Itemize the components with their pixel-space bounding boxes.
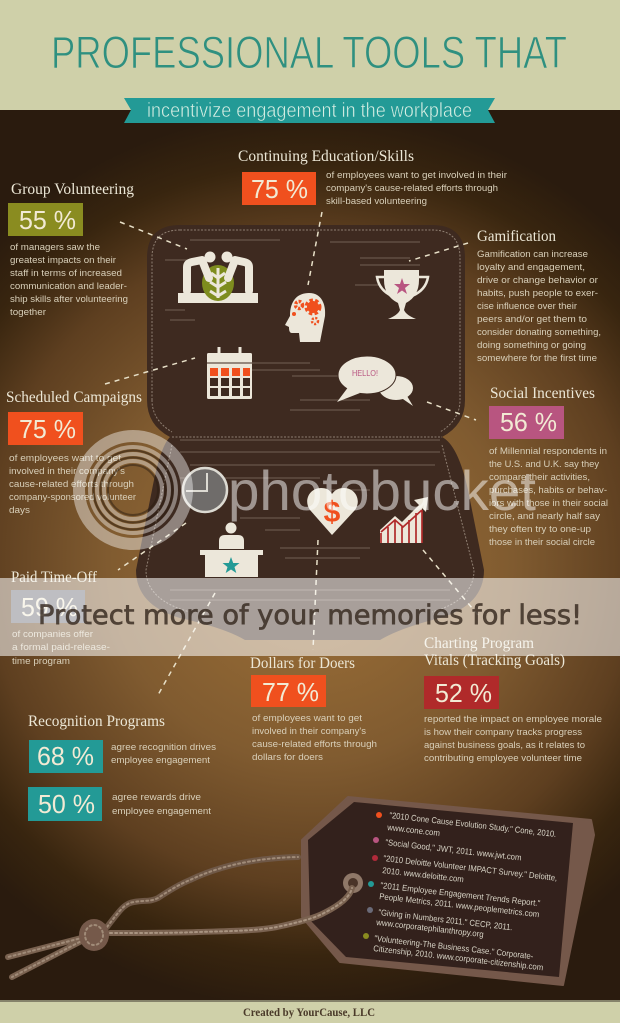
watermark logo xyxy=(79,436,187,544)
panel: dollars for doers: Dollars for Doers xyxy=(250,655,355,672)
panel: group volunteering xyxy=(8,181,134,318)
panel: paid time-off: of companies offer xyxy=(12,629,93,640)
panel: paid time-off: time program xyxy=(12,656,70,667)
panel: gamification xyxy=(477,228,601,364)
panel: social incentives: they often try to one-up xyxy=(489,524,591,535)
panel: continuing education: company's cause-related efforts through xyxy=(326,183,498,194)
sources tag xyxy=(302,797,594,985)
panel: continuing education: Continuing Education/Skills xyxy=(238,148,414,165)
panel: group volunteering: greatest impacts on their xyxy=(10,255,116,266)
panel: social incentives: of Millennial respondents in xyxy=(489,446,607,457)
panel: scheduled campaigns xyxy=(6,389,142,516)
panel: recognition programs: employee engagement xyxy=(111,755,210,766)
icon: calendar xyxy=(207,347,252,399)
panel: recognition programs: 68 % xyxy=(37,743,94,771)
panel: recognition programs: employee engagement xyxy=(112,806,211,817)
panel: scheduled campaigns: of employees want to get xyxy=(9,453,121,464)
header background xyxy=(0,0,620,110)
rope upper strand xyxy=(107,857,298,927)
panel: social incentives: circle, and nearly half say xyxy=(489,511,600,522)
panel: group volunteering: 55 % xyxy=(19,207,76,235)
panel: scheduled campaigns: company-sponsored volunteer xyxy=(9,492,136,503)
panel: dollars for doers: cause-related efforts through xyxy=(252,739,377,750)
panel: continuing education: skill-based volunteering xyxy=(326,196,427,207)
icon: clock xyxy=(183,468,227,512)
panel: recognition programs: agree rewards drive xyxy=(112,792,201,803)
sources tag: 2010. www.deloitte.com xyxy=(382,865,464,884)
panel: gamification: loyalty and engagement, xyxy=(477,262,585,273)
sources tag: "Social Good," JWT, 2011. www.jwt.com xyxy=(385,837,522,862)
panel: charting program vitals: Charting Program xyxy=(424,635,534,652)
panel: group volunteering: together xyxy=(10,307,46,318)
icon: person at podium with star xyxy=(200,522,263,577)
panel: continuing education: 75 % xyxy=(251,176,308,204)
panel: recognition programs: agree recognition drives xyxy=(111,742,216,753)
rope lower strand and knot xyxy=(8,888,352,977)
sources tag: "Volunteering-The Business Case." Corporate- xyxy=(374,933,534,961)
panel: gamification: consider donating something, xyxy=(477,327,601,338)
icon: speech bubbles: HELLO! xyxy=(352,369,378,378)
panel: scheduled campaigns: involved in their company's xyxy=(9,466,125,477)
panel: social incentives: Social Incentives xyxy=(490,385,595,402)
panel: charting program vitals: is how their company tracks progress xyxy=(424,727,582,738)
panel: paid time-off: 59 % xyxy=(21,594,78,622)
panel: paid time-off xyxy=(11,569,110,667)
panel: scheduled campaigns: Scheduled Campaigns xyxy=(6,389,142,406)
panel: paid time-off: a formal paid-release- xyxy=(12,642,110,653)
briefcase xyxy=(136,225,484,640)
panel: group volunteering: of managers saw the xyxy=(10,242,100,253)
panel: social incentives: 56 % xyxy=(500,409,557,437)
panel: group volunteering: Group Volunteering xyxy=(11,181,134,198)
watermark band: Protect more of your memories for less! xyxy=(38,600,582,631)
panel: social incentives: purchases, habits or behav- xyxy=(489,485,607,496)
sources tag: www.corporatephilanthropy.org xyxy=(375,917,484,939)
panel: gamification: habits, push people to exer- xyxy=(477,288,598,299)
icon: speech bubbles xyxy=(337,356,413,406)
sources tag: People Metrics, 2011. www.peoplemetrics.com xyxy=(379,891,540,919)
sources tag: "2010 Cone Cause Evolution Study." Cone, 2010. xyxy=(389,810,557,839)
panel: charting program vitals: 52 % xyxy=(435,680,492,708)
panel: gamification: Gamification xyxy=(477,228,556,245)
icon: brain gears head xyxy=(285,293,325,342)
panel: gamification: peers and/or get them to xyxy=(477,314,587,325)
panel: scheduled campaigns: 75 % xyxy=(19,416,76,444)
watermark wordmark: photobucket xyxy=(228,459,536,522)
sources tag: "2010 Deloitte Volunteer IMPACT Survey." Deloitte, xyxy=(383,853,558,883)
panel: charting program vitals: reported the impact on employee morale xyxy=(424,714,602,725)
panel: social incentives: those in their social circle xyxy=(489,537,595,548)
panel: group volunteering: staff in terms of increased xyxy=(10,268,122,279)
panel: paid time-off: Paid Time-Off xyxy=(11,569,98,586)
panel: social incentives: compare their activities, xyxy=(489,472,590,483)
panel: continuing education: of employees want to get involved in their xyxy=(326,170,507,181)
panel: social incentives: the U.S. and U.K. say they xyxy=(489,459,599,470)
panel: gamification: doing something or going xyxy=(477,340,586,351)
footer: Created by YourCause, LLC xyxy=(243,1005,375,1019)
panel: dollars for doers xyxy=(250,655,377,763)
panel: charting program vitals: contributing employee volunteer time xyxy=(424,753,582,764)
panel: gamification: somewhere for the first time xyxy=(477,353,597,364)
panel: dollars for doers: of employees want to get xyxy=(252,713,362,724)
footer xyxy=(0,1000,620,1023)
subtitle ribbon: incentivize engagement in the workplace xyxy=(147,100,472,122)
panel: group volunteering: ship skills after volunteering xyxy=(10,294,128,305)
panel: group volunteering: communication and leader- xyxy=(10,281,127,292)
panel: continuing education xyxy=(238,148,507,207)
panel: social incentives xyxy=(489,385,608,548)
panel: scheduled campaigns: days xyxy=(9,505,30,516)
panel: scheduled campaigns: cause-related efforts through xyxy=(9,479,134,490)
icon: trophy xyxy=(377,270,428,319)
sources tag: www.cone.com xyxy=(386,822,441,838)
panel: recognition programs: 50 % xyxy=(38,791,95,819)
icon: rising chart xyxy=(380,497,428,543)
connector dashes xyxy=(105,212,478,695)
panel: gamification: cise influence over their xyxy=(477,301,577,312)
panel: gamification: Gamification can increase xyxy=(477,249,588,260)
sources tag: "Giving in Numbers 2011." CECP, 2011. xyxy=(378,907,513,932)
panel: charting program vitals: against business goals, as it relates to xyxy=(424,740,585,751)
panel: charting program vitals xyxy=(424,635,602,764)
sources tag: "2011 Employee Engagement Trends Report." xyxy=(380,880,541,908)
icon: heart with dollar xyxy=(307,488,358,535)
panel: gamification: drive or change behavior or xyxy=(477,275,598,286)
panel: recognition programs: Recognition Programs xyxy=(28,713,165,730)
panel: social incentives: iors with those in their social xyxy=(489,498,608,509)
sources tag: Citizenship, 2010. www.corporate-citizenship.com xyxy=(373,943,544,972)
panel: charting program vitals: Vitals (Tracking Goals) xyxy=(424,652,565,669)
icon: group volunteering xyxy=(178,252,258,303)
watermark band xyxy=(0,578,620,656)
panel: dollars for doers: dollars for doers xyxy=(252,752,323,763)
icon: heart with dollar: $ xyxy=(324,496,341,529)
panel: dollars for doers: 77 % xyxy=(262,679,319,707)
panel: dollars for doers: involved in their company's xyxy=(252,726,366,737)
panel: recognition programs xyxy=(28,713,216,821)
